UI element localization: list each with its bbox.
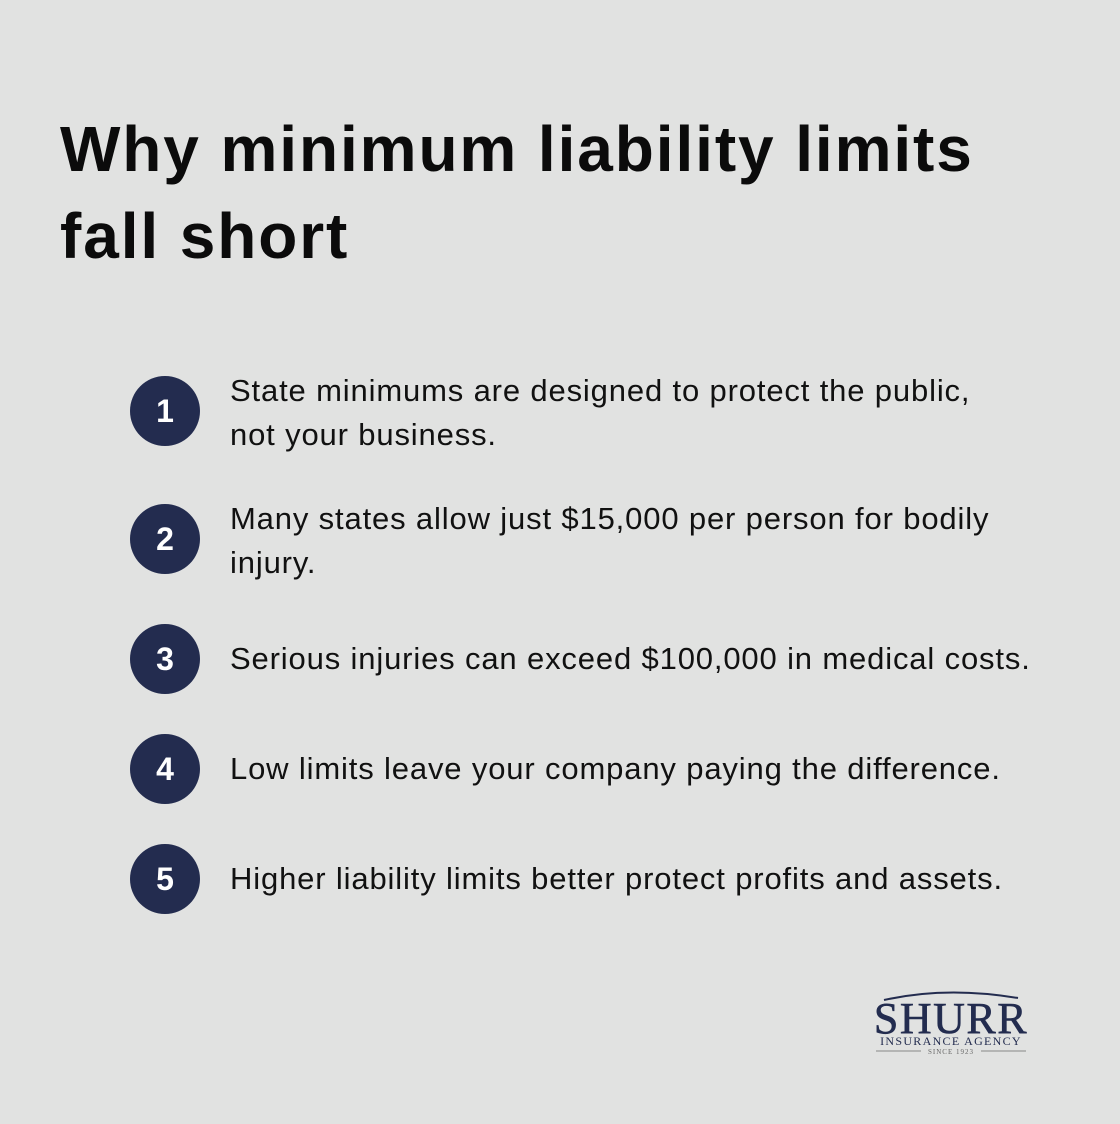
title <box>60 113 974 272</box>
number 5: 5 <box>156 861 174 897</box>
text 5: Higher liability limits better protect profits and assets. <box>230 861 1003 896</box>
text 4: Low limits leave your company paying the difference. <box>230 751 1001 786</box>
logo: INSURANCE AGENCY <box>880 1034 1022 1048</box>
item 5 <box>130 844 1003 914</box>
item 4 <box>130 734 1001 804</box>
text 2: Many states allow just $15,000 per person for bodily <box>230 501 989 536</box>
text 1 <box>230 373 970 452</box>
text 1: State minimums are designed to protect the public, <box>230 373 970 408</box>
text 2: injury. <box>230 545 316 580</box>
text 1: not your business. <box>230 417 497 452</box>
title: Why minimum liability limits <box>60 113 974 185</box>
title: fall short <box>60 200 349 272</box>
number 4 <box>130 734 200 804</box>
number 4: 4 <box>156 751 174 787</box>
number 2: 2 <box>156 521 174 557</box>
number 3: 3 <box>156 641 174 677</box>
logo: SHURR <box>874 994 1028 1043</box>
number 3 <box>130 624 200 694</box>
item 3 <box>130 624 1031 694</box>
logo: SINCE 1923 <box>928 1048 974 1056</box>
number 2 <box>130 504 200 574</box>
number 1 <box>130 376 200 446</box>
text 2 <box>230 501 989 580</box>
item 2 <box>130 501 989 580</box>
item 1 <box>130 373 970 452</box>
number 5 <box>130 844 200 914</box>
text 3: Serious injuries can exceed $100,000 in medical costs. <box>230 641 1031 676</box>
number 1: 1 <box>156 393 174 429</box>
